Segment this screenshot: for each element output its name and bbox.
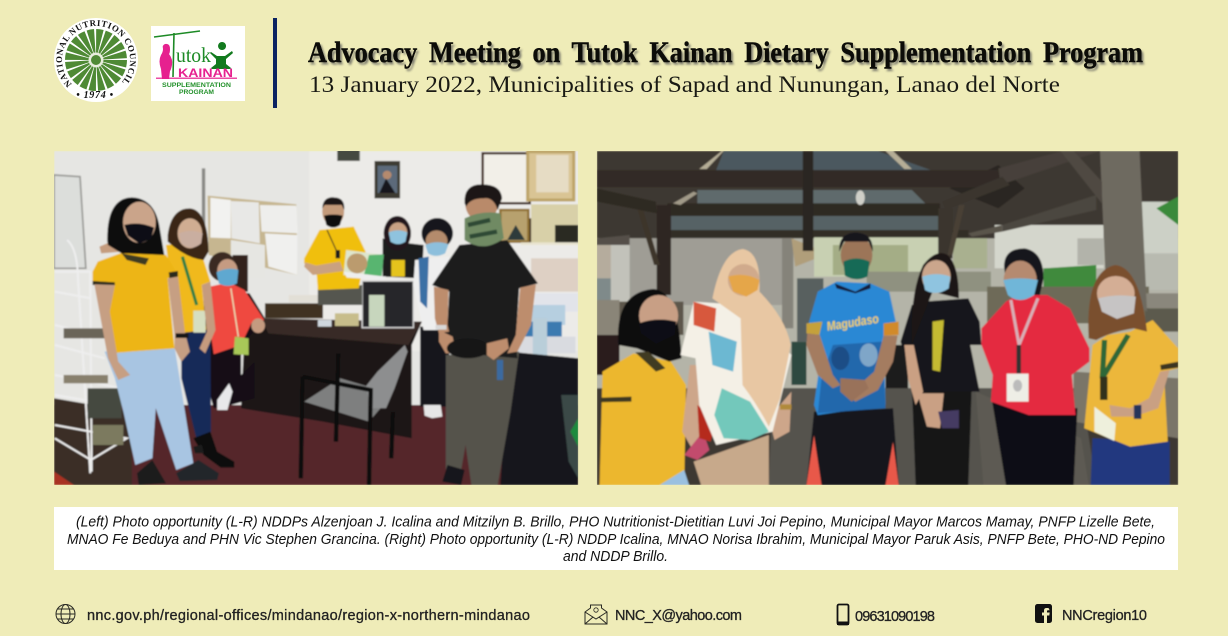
photo: right, outdoor group: Magudaso: [825, 312, 880, 333]
man: [806, 408, 899, 485]
header divider bar: [273, 18, 277, 108]
logo: National Nutrition Council seal: NATIONAL NUTRITION COUNCIL: [56, 20, 136, 88]
logo: Tutok Kainan Supplementation Program: [151, 26, 245, 101]
footer: phone: 09631090198: [855, 609, 935, 625]
caption box: (Left) Photo opportunity (L-R) NDDPs Alzenjoan J. Icalina and Mitzilyn B. Brillo, PHO Nutritionist-Dietitian Luvi Joi Pepino, Municipal Mayor Marcos Mamay, PNFP Lizelle Bete,: [76, 514, 1155, 530]
footer: email: NNC_X@yahoo.com: [615, 608, 742, 624]
caption box: MNAO Fe Beduya and PHN Vic Stephen Grancina. (Right) Photo opportunity (L-R) NDDP Icalina, MNAO Norisa Ibrahim, Municipal Mayor Paruk Asis, PNFP Bete, PHO-ND Pepino: [67, 531, 1165, 548]
footer: website: nnc.gov.ph/regional-offices/mindanao/region-x-northern-mindanao: [87, 608, 530, 624]
footer: email: [585, 605, 742, 624]
footer: Facebook: [1035, 604, 1147, 624]
photo: right, outdoor group: [597, 151, 1178, 485]
logo: Tutok Kainan Supplementation Program: KAINAN: [178, 66, 233, 80]
logo: Tutok Kainan Supplementation Program: SUPPLEMENTATION: [162, 82, 231, 89]
logo: National Nutrition Council seal: • 1974 •: [76, 90, 114, 101]
footer: Facebook: NNCregion10: [1062, 608, 1147, 624]
photo: left, office group: [54, 150, 578, 485]
caption box: and NDDP Brillo.: [563, 548, 668, 565]
footer: phone: [837, 604, 935, 625]
woman 5: [1091, 438, 1170, 485]
caption box: [54, 507, 1178, 570]
woman 2: [694, 435, 769, 485]
subtitle: date and location: 13 January 2022, Municipalities of Sapad and Nunungan, Lanao del Norte: [309, 72, 1060, 97]
woman 1: [600, 353, 686, 485]
logo: Tutok Kainan Supplementation Program: PROGRAM: [179, 89, 214, 96]
woman 4: [992, 398, 1077, 485]
woman 3: [912, 390, 972, 485]
logo: Tutok Kainan Supplementation Program: utok: [176, 43, 211, 67]
